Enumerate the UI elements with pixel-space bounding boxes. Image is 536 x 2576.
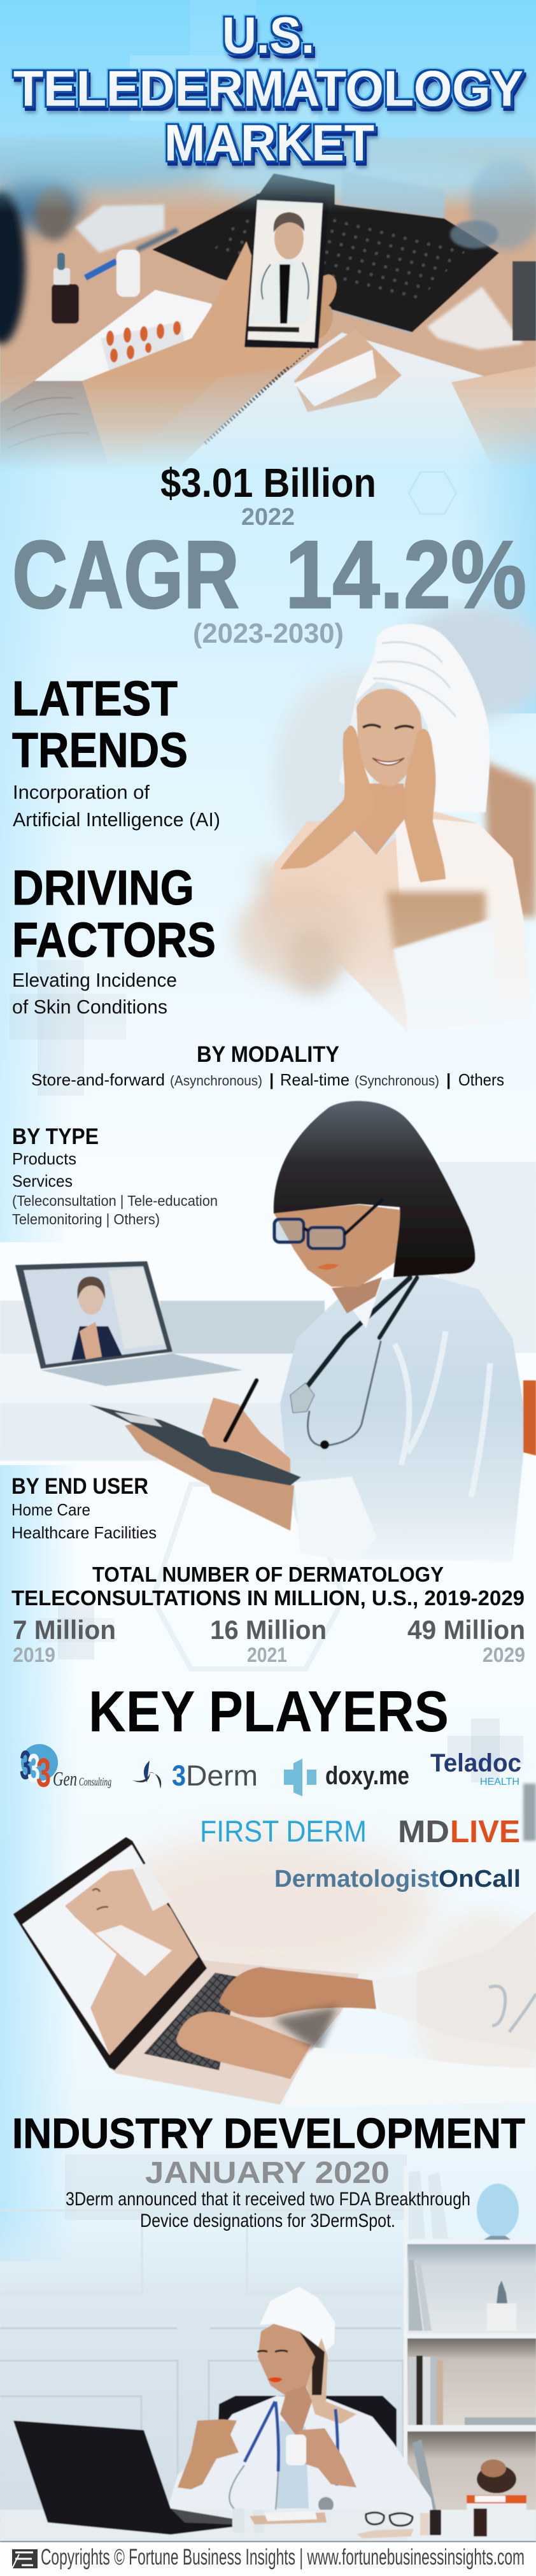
logo: MDLive: LIVE <box>450 1815 520 1849</box>
illustration: woman with towel touching her face <box>236 605 536 1032</box>
logo: DermatologistOnCall: OnCall <box>439 1866 521 1893</box>
text block: by type: Services <box>12 1171 73 1191</box>
title: MARKET <box>164 115 374 172</box>
text block: january 2020 development <box>66 2156 470 2231</box>
text block: january 2020 development: JANUARY 2020 <box>145 2156 390 2190</box>
heading: total number of teleconsultations <box>11 1563 525 1610</box>
text block: latest trends: LATEST <box>12 671 178 726</box>
text block: by modality: | <box>446 1070 451 1089</box>
title: TELEDERMATOLOGY <box>13 60 523 117</box>
logo: 3Derm <box>132 1759 258 1792</box>
text block: by end user: BY END USER <box>11 1474 148 1499</box>
statistics: teleconsultations by year: 2019 <box>13 1643 55 1666</box>
text block: driving factors: Elevating Incidence <box>12 969 177 991</box>
footer <box>0 2542 536 2576</box>
heading: CAGR: CAGR <box>12 520 239 628</box>
logo: DermatologistOnCall: Dermatologist <box>274 1866 439 1893</box>
heading: market size: 2022 <box>241 504 295 531</box>
heading: key players: KEY PLAYERS <box>88 1680 449 1744</box>
text block: driving factors: FACTORS <box>12 913 216 968</box>
logo: 3Derm: Derm <box>186 1759 258 1792</box>
logo: 3Gen Consulting <box>20 1742 111 1796</box>
text block: by modality: (Asynchronous) <box>170 1073 262 1089</box>
text block: by end user: Home Care <box>11 1500 90 1519</box>
text block: by end user: Healthcare Facilities <box>11 1523 157 1542</box>
illustration: hand holding phone with doctor video call on desk <box>0 137 536 475</box>
logo: 3Gen Consulting: 3 <box>20 1742 31 1788</box>
text block: by modality: Store-and-forward <box>31 1070 165 1089</box>
logo: doxy.me <box>284 1759 409 1796</box>
text block: latest trends: Artificial Intelligence (AI) <box>13 808 220 831</box>
heading: market size <box>160 460 376 531</box>
text block: by modality: | <box>269 1070 274 1089</box>
statistics: teleconsultations by year: 2021 <box>247 1643 287 1666</box>
statistics: teleconsultations by year <box>13 1615 525 1666</box>
text block: january 2020 development: Device designations for 3DermSpot. <box>140 2210 395 2231</box>
logo: doxy.me: doxy.me <box>325 1762 409 1790</box>
heading: CAGR: (2023-2030) <box>193 618 344 649</box>
illustration: doctor with clipboard and video call on laptop <box>0 1101 536 1562</box>
text block: driving factors: DRIVING <box>12 861 194 915</box>
heading: CAGR <box>12 520 526 649</box>
text block: by modality: BY MODALITY <box>197 1042 339 1067</box>
text block: driving factors <box>12 861 216 1018</box>
statistics: teleconsultations by year: 16 Million <box>210 1615 327 1645</box>
title: U.S. <box>222 7 314 64</box>
text block: latest trends: Incorporation of <box>13 781 150 803</box>
logo: 3Derm: 3 <box>172 1759 186 1792</box>
text block: by type: Telemonitoring | Others) <box>12 1211 160 1227</box>
logo: MDLive: MD <box>398 1815 449 1849</box>
text block: january 2020 development: 3Derm announced that it received two FDA Breakthrough <box>66 2189 470 2210</box>
text block: by type <box>12 1124 218 1227</box>
statistics: teleconsultations by year: 49 Million <box>407 1615 525 1645</box>
text block: by type: (Teleconsultation | Tele-education <box>12 1192 218 1209</box>
logo: DermatologistOnCall <box>274 1866 521 1893</box>
logo: MDLive <box>398 1815 520 1849</box>
statistics: teleconsultations by year: 2029 <box>483 1643 525 1666</box>
illustration: doctor at desk with laptop in office <box>0 2166 536 2542</box>
logo: Teladoc Health: Teladoc <box>430 1749 521 1777</box>
logo: 3Gen Consulting: 3 <box>27 1745 40 1791</box>
icon: Fortune Business Insights mark <box>12 2549 38 2568</box>
text block: by type: BY TYPE <box>12 1124 99 1149</box>
heading: total number of teleconsultations: TOTAL NUMBER OF DERMATOLOGY <box>92 1563 444 1586</box>
text block: by type: Products <box>12 1149 76 1168</box>
heading: market size: $3.01 Billion <box>160 460 376 506</box>
text block: by modality: Real-time <box>280 1070 349 1089</box>
logo: Teladoc Health: HEALTH <box>480 1777 519 1787</box>
logo: 3Gen Consulting: 3 <box>36 1750 51 1796</box>
text block: by modality: Others <box>458 1070 504 1089</box>
text block: driving factors: of Skin Conditions <box>12 996 167 1018</box>
illustration: doctor typing on laptop showing skin treatment <box>13 1784 536 2107</box>
logo: 3Gen Consulting: Consulting <box>79 1775 111 1788</box>
text block: latest trends <box>12 671 220 831</box>
heading: total number of teleconsultations: TELECONSULTATIONS IN MILLION, U.S., 2019-2029 <box>11 1586 525 1610</box>
logo: 3Gen Consulting: Gen <box>53 1767 77 1790</box>
text block: by modality: (Synchronous) <box>355 1073 439 1089</box>
text block: by end user <box>11 1474 157 1542</box>
text block: by modality <box>31 1042 504 1089</box>
logo: First Derm: FIRST DERM <box>200 1814 367 1848</box>
title <box>13 7 523 172</box>
text block: latest trends: TRENDS <box>12 723 188 778</box>
statistics: teleconsultations by year: 7 Million <box>13 1615 116 1645</box>
